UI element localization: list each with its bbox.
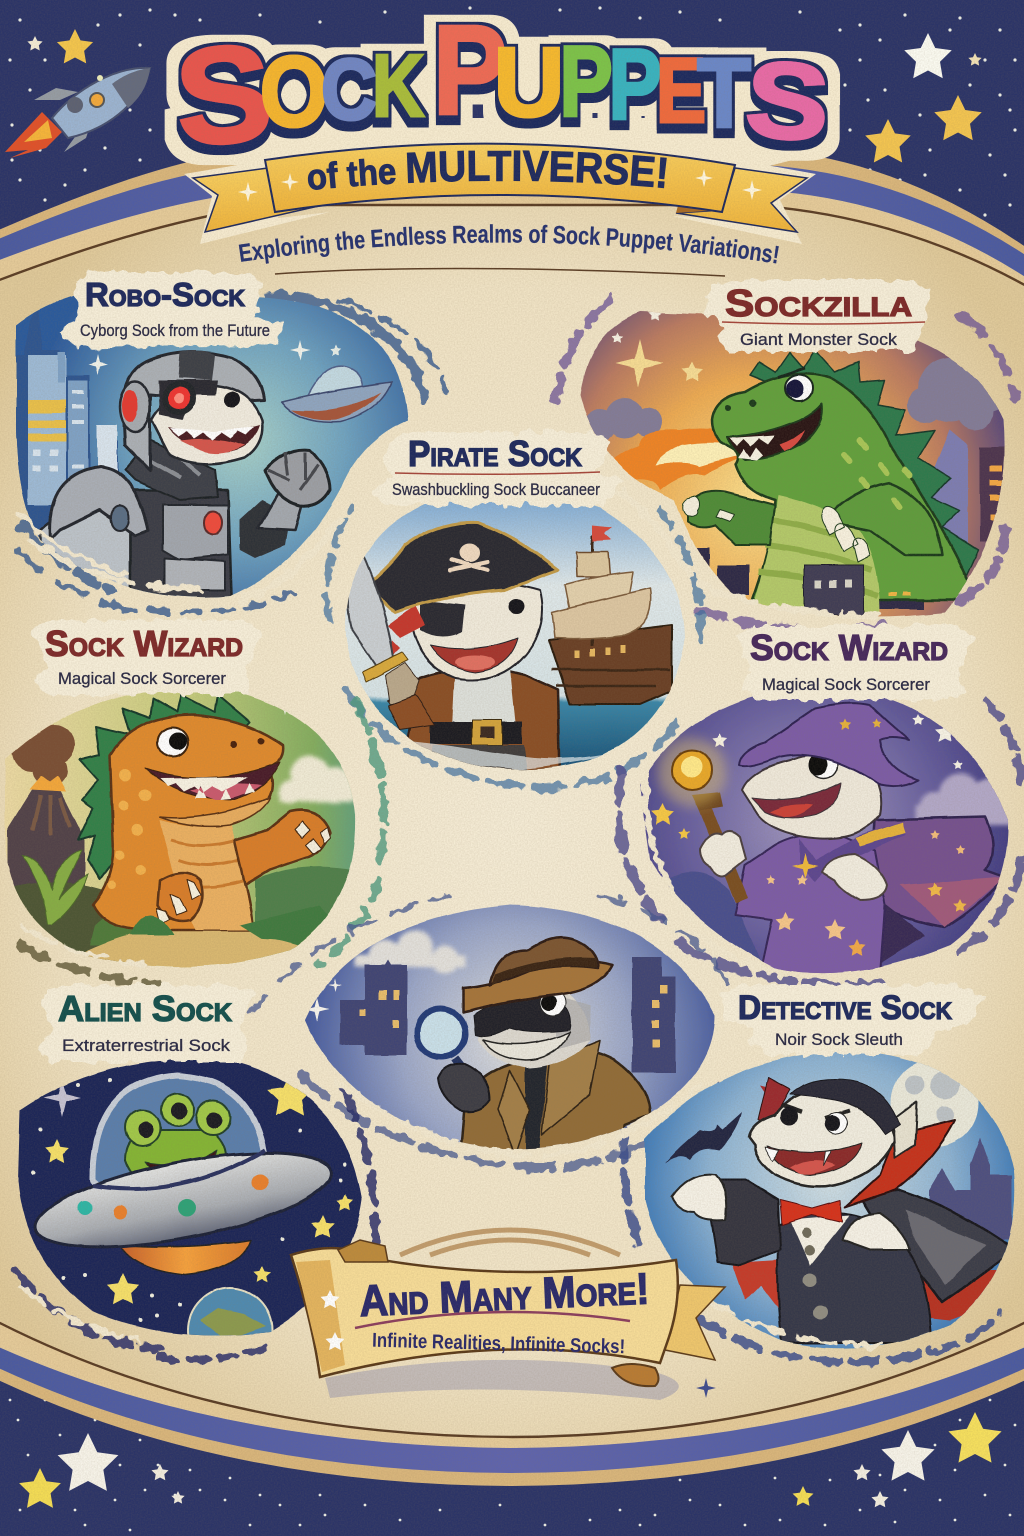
icon: rocket	[5, 68, 150, 158]
scroll: And Many More	[291, 1230, 725, 1400]
swirl brush strokes around panels	[15, 295, 1022, 1362]
icon: city skyline	[16, 310, 119, 569]
icon: clouds	[915, 773, 1015, 825]
character: robot sock	[40, 351, 330, 610]
icon: planet	[188, 1288, 272, 1372]
character: orange dino sock	[78, 695, 330, 930]
label: Alien Sock: Alien Sock	[58, 988, 232, 1029]
icon: noir buildings	[340, 957, 675, 1072]
icon: flying saucer	[282, 366, 392, 422]
icon: clouds	[355, 930, 465, 974]
character: pirate sock	[348, 522, 560, 780]
icon: pirate ship	[549, 525, 672, 704]
icon: castle	[929, 1137, 1012, 1240]
panel: Sockzilla scene	[580, 311, 1005, 616]
title: Sock Puppets: O	[260, 36, 328, 147]
title: Sock Puppets: K	[372, 37, 424, 136]
label: Sockzilla: Sockzilla	[725, 283, 912, 325]
title: Sock Puppets: E	[656, 39, 706, 142]
label: Pirate Sock	[372, 432, 622, 505]
label: Sock Wizard right: Magical Sock Sorcerer	[762, 675, 930, 694]
panel: Detective Sock scene	[300, 895, 720, 1165]
tagline: Exploring the Endless Realms of Sock Puppet Variations!	[238, 224, 779, 264]
title: Sock Puppets: U	[494, 27, 564, 137]
title: Sock Puppets: S	[742, 38, 833, 164]
title: Sock Puppets: S	[171, 15, 277, 175]
scroll: And Many More: And Many More!	[358, 1264, 650, 1326]
icon: moon	[891, 1059, 979, 1147]
label: Robo-Sock: Robo-Sock	[85, 276, 245, 313]
title: Sock Puppets: P	[433, 0, 507, 142]
label: Detective Sock	[722, 985, 985, 1055]
icon: fire breath	[614, 428, 737, 490]
label: Sock Wizard left	[30, 620, 262, 695]
icon: clouds	[278, 755, 355, 804]
scroll: And Many More: Infinite Realities, Infinite Socks!	[372, 1330, 625, 1358]
title: Sock Puppets: P	[559, 27, 613, 138]
label: Robo-Sock	[62, 272, 282, 348]
label: Pirate Sock: Swashbuckling Sock Buccaneer	[392, 480, 600, 499]
icon: bat	[665, 1112, 742, 1163]
label: Detective Sock: Noir Sock Sleuth	[775, 1030, 903, 1049]
label: Sock Wizard left: Magical Sock Sorcerer	[58, 669, 226, 688]
panel: orange dino scene	[4, 692, 356, 968]
title: Sock Puppets	[171, 0, 833, 175]
icon: smoke clouds	[584, 357, 1013, 441]
panel: Sock Wizard scene	[640, 696, 1008, 974]
title: Sock Puppets: P	[608, 30, 662, 141]
panel: Robo-Sock scene	[16, 296, 408, 598]
title backing	[172, 118, 832, 172]
label: Sockzilla	[705, 280, 930, 352]
character: wizard sock	[652, 703, 1005, 975]
icon: city buildings	[685, 430, 1010, 609]
label: Alien Sock	[38, 985, 255, 1062]
label: Sock Wizard left: Sock Wizard	[45, 623, 243, 664]
label: Robo-Sock: Cyborg Sock from the Future	[80, 321, 270, 340]
title: Sock Puppets: T	[697, 39, 751, 148]
panel: Pirate Sock scene	[345, 501, 685, 770]
label: Detective Sock: Detective Sock	[738, 989, 953, 1027]
label: Sock Wizard right: Sock Wizard	[750, 627, 948, 668]
icon: jungle	[14, 849, 350, 968]
character: vampire sock	[672, 1078, 1015, 1343]
label: Pirate Sock: Pirate Sock	[408, 433, 582, 474]
title: Sock Puppets: C	[321, 42, 377, 138]
banner: of the Multiverse	[184, 142, 816, 244]
character: alien sock in saucer	[28, 1075, 337, 1275]
label: Sock Wizard right	[735, 625, 975, 700]
icon: volcano	[7, 725, 85, 900]
panel: vampire scene	[630, 1040, 1024, 1360]
label: Alien Sock: Extraterrestrial Sock	[62, 1036, 231, 1055]
panel: Alien Sock scene	[0, 1050, 370, 1372]
banner: of the Multiverse: of the MULTIVERSE!	[308, 150, 667, 190]
character: green monster sock	[683, 350, 978, 615]
cream brush accents over panels	[20, 480, 880, 1345]
label: Sockzilla: Giant Monster Sock	[740, 330, 898, 349]
character: detective sock	[417, 938, 650, 1160]
